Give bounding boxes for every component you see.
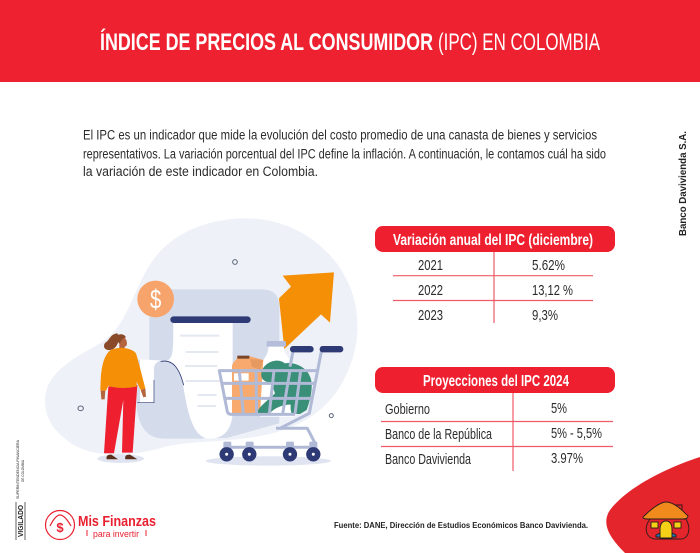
- icon: dollar coin: [137, 281, 174, 317]
- logo: Mis Finanzas: [46, 510, 156, 540]
- vigilado label: [16, 439, 25, 540]
- shopping cart with groceries: [219, 341, 343, 459]
- table rows: Gobierno: [385, 401, 430, 418]
- woman: [100, 333, 146, 459]
- table rows: 2022: [418, 282, 443, 299]
- table rows: Banco de la República: [385, 426, 492, 443]
- table rows: 9,3%: [532, 307, 558, 324]
- illustration: shopping and rising prices: [45, 218, 358, 466]
- ground shadows: [97, 454, 331, 466]
- table rows: 13,12 %: [532, 282, 573, 299]
- table: proyecciones: [375, 367, 615, 471]
- vigilado label: SUPERINTENDENCIA FINANCIERA: [16, 439, 20, 499]
- milk bottle: [260, 346, 293, 417]
- vigilado label: VIGILADO: [18, 504, 25, 537]
- table rows: 3.97%: [551, 450, 583, 467]
- carton: [232, 356, 263, 414]
- icon: dollar coin: $: [150, 285, 161, 315]
- background blob: [45, 218, 358, 454]
- icon: rising arrow: [279, 272, 334, 349]
- side label: Banco Davivienda: Banco Davivienda S.A.: [678, 131, 689, 236]
- logo icon: $: [56, 520, 64, 535]
- title: (IPC) EN COLOMBIA: [438, 29, 600, 56]
- header banner: [0, 0, 700, 82]
- table rows: 5%: [551, 400, 567, 417]
- receipt machine: [137, 289, 279, 439]
- table header: [375, 226, 615, 252]
- table: variación anual: [375, 226, 615, 324]
- floating circles: [78, 260, 333, 418]
- vigilado label: DE COLOMBIA: [21, 459, 25, 482]
- intro text: El IPC es un indicador que mide la evolución del costo promedio de una canasta de bienes y servicios: [83, 128, 597, 142]
- table rows: 2021: [418, 257, 443, 274]
- icon: house: [643, 502, 689, 539]
- corner shape with Davivienda house logo: [606, 457, 700, 553]
- logo: Mis Finanzas: para invertir: [93, 529, 139, 539]
- intro text: la variación de este indicador en Colombia.: [83, 164, 318, 179]
- title: ÍNDICE DE PRECIOS AL CONSUMIDOR: [100, 28, 433, 56]
- table rows: [385, 400, 602, 468]
- table header: Variación anual del IPC (diciembre): [393, 232, 593, 249]
- table rows: [418, 257, 573, 324]
- intro text: [83, 128, 606, 179]
- table rows: 5% - 5,5%: [551, 425, 602, 442]
- cart frame: [219, 350, 322, 447]
- broccoli: [257, 361, 312, 414]
- logo: Mis Finanzas: Mis Finanzas: [78, 513, 156, 530]
- table rows: 5.62%: [532, 257, 565, 274]
- source note: Fuente: DANE, Dirección de Estudios Económicos Banco Davivienda.: [334, 521, 588, 530]
- table rows: Banco Davivienda: [385, 451, 471, 468]
- table rows: 2023: [418, 307, 443, 324]
- table header: Proyecciones del IPC 2024: [423, 373, 569, 390]
- table header: [375, 367, 615, 393]
